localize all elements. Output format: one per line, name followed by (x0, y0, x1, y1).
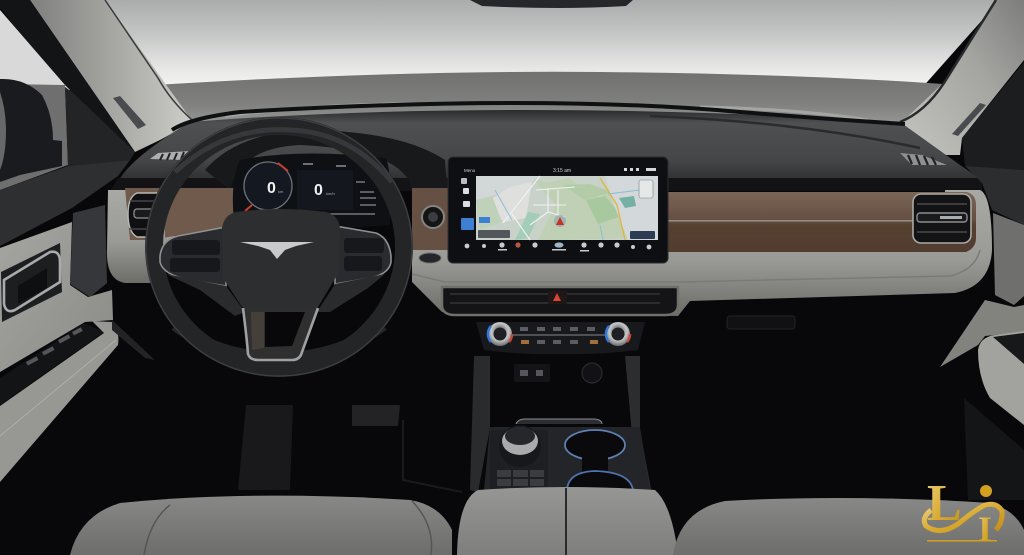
right seat (673, 498, 1024, 555)
wood trim left (125, 188, 236, 240)
dash lip curve (650, 116, 920, 148)
left door handle (1, 243, 62, 322)
hood highlights (225, 104, 868, 120)
left door panel (0, 222, 113, 372)
right climate knob (606, 322, 630, 346)
logo (924, 475, 1002, 549)
lower spoke beige inset (251, 312, 264, 350)
left A-pillar (30, 0, 193, 152)
right air vent (913, 194, 971, 243)
left pillar dark rubber (0, 0, 135, 160)
left door upper band (0, 160, 130, 246)
rear cup holder (567, 471, 633, 490)
lower trim crease (412, 250, 980, 282)
lower dash glovebox handle (727, 316, 795, 329)
wheel emblem (240, 242, 314, 259)
door pillar dark inset (65, 87, 135, 166)
driver floor mat (238, 405, 293, 490)
centre air vent strip (442, 287, 678, 315)
small dash button (419, 253, 441, 263)
centre readout: km/h (326, 191, 335, 196)
pillar vents (113, 96, 986, 136)
cup holder bridge (582, 455, 608, 479)
car hood through windshield (155, 72, 943, 124)
defrost vent right (900, 153, 947, 165)
touchscreen (448, 157, 668, 263)
left spoke (160, 227, 226, 286)
map controls (478, 230, 510, 238)
wheel rim (154, 126, 404, 368)
right armrest (978, 331, 1024, 425)
console tray edge (516, 419, 602, 424)
right door dark pocket (993, 333, 1024, 364)
console side rail right (625, 356, 652, 494)
left seat (70, 496, 452, 555)
left controls (170, 240, 220, 272)
screen bottom icons (465, 242, 651, 252)
screen status bar: 3:15 am (553, 168, 571, 174)
left armrest (0, 321, 118, 482)
compass tile (639, 180, 653, 198)
right A-pillar (900, 0, 1024, 155)
left door switch panel (0, 323, 104, 405)
wood inlay line (668, 220, 914, 222)
airbag hub (222, 209, 340, 310)
logo base line (927, 540, 997, 542)
right upper dark inset (962, 62, 1024, 170)
lower spoke opening (265, 312, 305, 347)
rearview mirror (470, 0, 633, 8)
door speaker grille (70, 205, 107, 297)
logo dot (980, 485, 992, 497)
speedometer gauge (244, 162, 292, 211)
left lower dash trim (107, 190, 175, 283)
speedometer gauge: 0 (267, 180, 276, 197)
console side rail left (470, 356, 490, 492)
cluster hood (205, 130, 447, 190)
openings below spokes (152, 272, 406, 360)
left door mirror (0, 79, 62, 182)
left window scenery (0, 84, 68, 190)
steering wheel (146, 118, 412, 376)
centre readout: 0 (314, 182, 323, 199)
logo swoosh (924, 504, 1002, 531)
screen status bar (464, 168, 656, 174)
windshield sky (100, 0, 1000, 90)
left column switches (178, 285, 214, 307)
console armrest lid (457, 487, 678, 555)
speedometer gauge: km (278, 189, 284, 194)
right controls (344, 238, 384, 271)
seat seam (144, 501, 432, 555)
spoke arms (166, 274, 245, 316)
front cup holder (565, 430, 625, 460)
rim stitching (146, 118, 412, 376)
right door band (965, 166, 1024, 225)
rotary gear selector (499, 425, 541, 467)
defrost vent left (150, 151, 190, 160)
climate control panel (476, 322, 645, 354)
lower spoke body (243, 305, 318, 360)
right spoke arm (317, 274, 385, 312)
mirror glass (0, 92, 6, 170)
lid centre seam (565, 488, 567, 555)
navigation map (476, 176, 658, 240)
left climate knob (488, 322, 512, 346)
logo: L (927, 475, 962, 532)
screen side icons (461, 178, 474, 230)
wood trim centre (412, 188, 450, 250)
left air vent (128, 193, 164, 237)
cluster right readouts (330, 182, 376, 214)
right door lower grey (940, 300, 1024, 367)
windshield frame left (105, 0, 192, 120)
right spoke (335, 226, 391, 284)
USB ports (514, 364, 550, 382)
console buttons (497, 470, 544, 486)
instrument cluster (233, 153, 390, 232)
dashboard shadow band (110, 178, 982, 191)
start button (422, 206, 444, 228)
right lower dash trim (412, 190, 992, 316)
lower console (484, 425, 650, 490)
lower spoke chrome (243, 308, 318, 360)
map badge (479, 217, 490, 223)
right door dark lower (964, 398, 1024, 500)
lower rim thickening (175, 325, 383, 358)
armrest stitch (0, 340, 116, 436)
rim upper highlight (175, 130, 392, 182)
right door panel (993, 213, 1024, 305)
map location marker (554, 215, 566, 227)
left knee panel (112, 320, 155, 360)
pedal (352, 405, 400, 426)
wood trim right (668, 192, 976, 252)
windshield base line (172, 103, 905, 130)
screen status bar: Menu (464, 168, 476, 173)
cluster status row (303, 164, 346, 166)
logo: I (978, 509, 992, 549)
map legend (630, 231, 655, 239)
dashboard top (118, 110, 985, 182)
hazard button (548, 291, 567, 304)
centre readout (297, 170, 353, 210)
windshield frame right (900, 0, 996, 122)
round power socket (582, 363, 602, 383)
left window sky (0, 10, 70, 90)
footwell edge (403, 420, 462, 492)
